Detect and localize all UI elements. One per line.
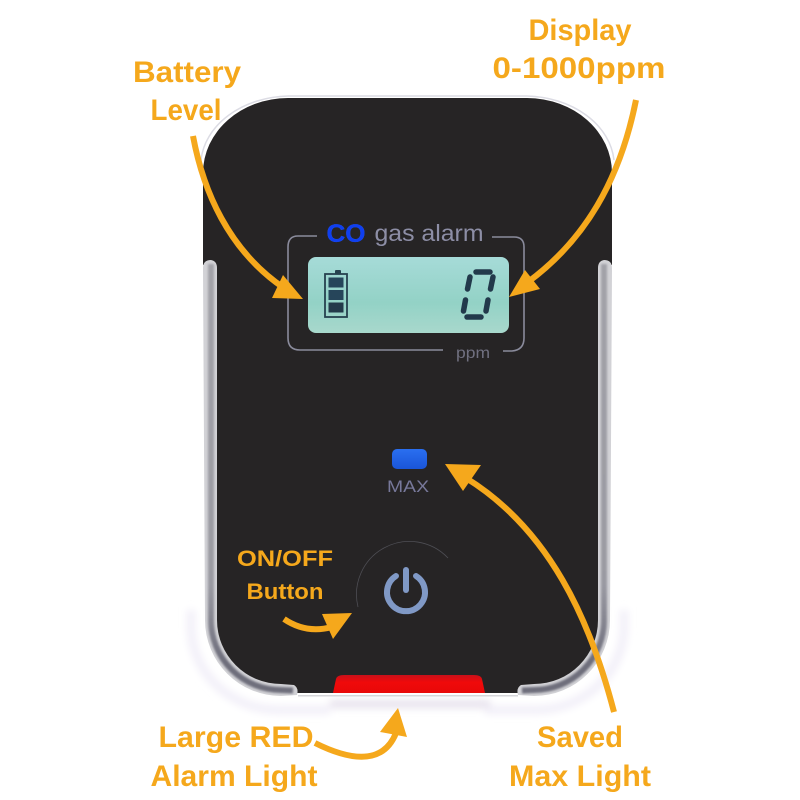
red alarm light (333, 675, 485, 693)
callout: Large RED Alarm Light: Large RED (158, 721, 314, 754)
right silver frame (517, 260, 612, 696)
callout: Battery Level (133, 56, 241, 127)
icon: battery level (325, 270, 347, 317)
label: CO: CO (326, 220, 366, 248)
callout: ON/OFF Button: ON/OFF (237, 546, 333, 571)
icon: power symbol (387, 570, 425, 611)
arrow: display reading (509, 100, 636, 297)
callout: Display 0-1000ppm (492, 14, 666, 85)
power button ring (356, 541, 448, 607)
device outer casing halo (191, 610, 624, 710)
callout: Saved Max Light: Max Light (509, 760, 651, 793)
lower casing edge (298, 695, 518, 696)
callout: Saved Max Light: Saved (537, 721, 623, 754)
callout: Battery Level: Level (150, 94, 222, 127)
callout: ON/OFF Button (237, 546, 333, 604)
LCD screen (308, 257, 509, 333)
callout: Large RED Alarm Light (150, 721, 318, 793)
label: ppm: ppm (456, 345, 490, 362)
callout: Battery Level: Battery (133, 56, 241, 89)
callout: Display 0-1000ppm: Display (528, 14, 632, 47)
label: gas alarm: gas alarm (374, 220, 484, 246)
callout: ON/OFF Button: Button (246, 579, 324, 604)
arrow: ON/OFF button (284, 613, 352, 639)
label: MAX: MAX (387, 477, 429, 496)
callout: Saved Max Light (509, 721, 651, 793)
device black face (203, 98, 612, 693)
digit: 0 reading (464, 272, 493, 317)
arrow: saved max light (445, 464, 614, 712)
left silver frame (203, 260, 298, 696)
display bracket frame (288, 236, 524, 351)
arrow: red alarm light (315, 708, 407, 757)
arrow: battery level (193, 136, 303, 299)
MAX blue LED (392, 449, 427, 469)
callout: Display 0-1000ppm: 0-1000ppm (492, 52, 666, 85)
device top outline (201, 96, 614, 160)
callout: Large RED Alarm Light: Alarm Light (150, 760, 318, 793)
